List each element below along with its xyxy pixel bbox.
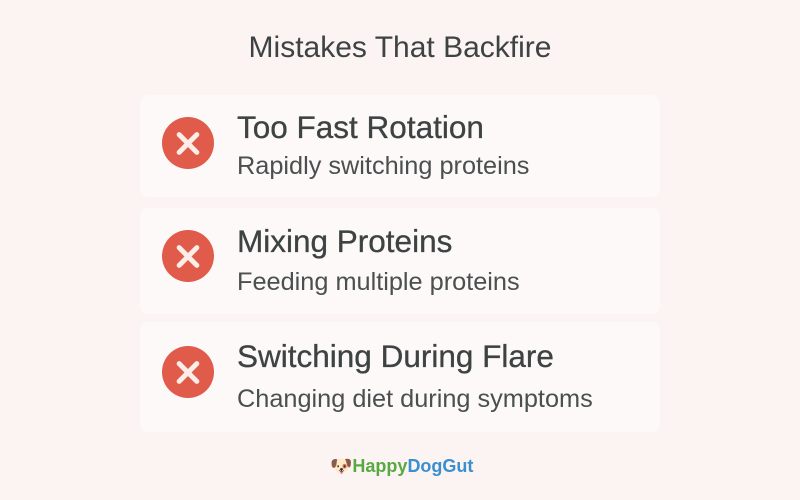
title: Mistakes That Backfire	[249, 31, 551, 64]
icon: x 1	[162, 117, 214, 169]
logo: 🐶HappyDogGut	[330, 456, 473, 476]
heading 1: Too Fast Rotation	[237, 109, 484, 145]
text 3: Changing diet during symptoms	[237, 385, 593, 413]
heading 2: Mixing Proteins	[237, 223, 452, 259]
icon: x 3	[162, 346, 214, 398]
text 1: Rapidly switching proteins	[237, 152, 529, 180]
heading 3: Switching During Flare	[237, 338, 554, 374]
card: mixing proteins	[140, 208, 660, 314]
card: switching during flare	[140, 322, 660, 432]
card: too fast rotation	[140, 95, 660, 197]
text 2: Feeding multiple proteins	[237, 268, 520, 296]
icon: x 2	[162, 230, 214, 282]
